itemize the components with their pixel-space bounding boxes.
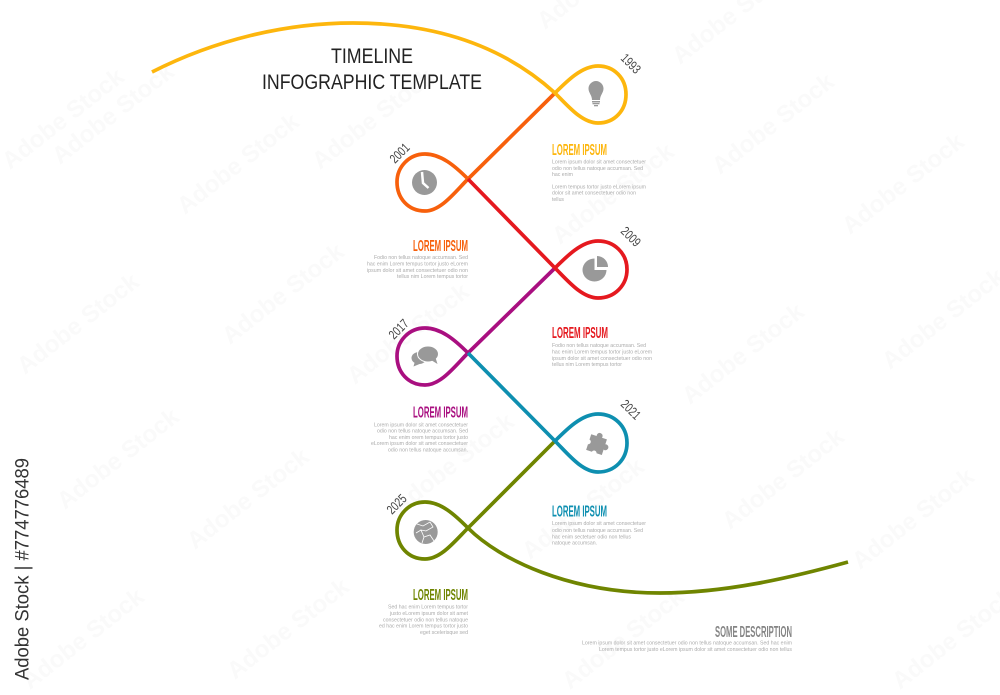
text block: 1993: LOREM IPSUM — [552, 142, 607, 159]
text block: 1993: Lorem tempus tortor justo eLorem ipsum — [552, 184, 646, 190]
icon: light bulb — [588, 81, 604, 106]
watermark pattern: Adobe Stock — [342, 278, 475, 390]
icon: pie chart — [582, 256, 608, 282]
text block: 1993: dolor sit amet consectetuer odio non — [552, 190, 636, 196]
title: TIMELINE — [331, 44, 413, 68]
text block: some description: Lorem tempus tortor justo eLorem ipsum dolor sit amet consectetuer odio non tellus — [599, 647, 792, 653]
text: SOME DESCRIPTION — [715, 624, 792, 641]
text block: 1993 — [552, 142, 646, 203]
text block: 2001: Fodio non tellus natoque accumsan. Sed — [374, 255, 468, 261]
yellow opening arc and 1993 loop — [152, 23, 626, 123]
icon: puzzle piece — [582, 430, 612, 459]
watermark pattern: Adobe Stock — [307, 63, 440, 175]
text block: 2009: Fodio non tellus natoque accumsan. Sed — [552, 343, 646, 349]
stock credit: Adobe Stock | #774776489 — [12, 458, 34, 680]
text block: 2001 — [367, 238, 468, 280]
year: 2021: 2021 — [618, 397, 644, 423]
watermark pattern: Adobe Stock — [182, 443, 315, 555]
watermark pattern: Adobe Stock — [707, 68, 840, 180]
watermark pattern: Adobe Stock — [387, 408, 520, 520]
text block: 2017: eLorem ipsum dolor sit amet consectetuer — [371, 441, 468, 447]
text block: 2009: tellus nim Lorem tempus tortor — [552, 362, 622, 368]
text block: 2017 — [371, 404, 468, 454]
text block: 1993: hac enim — [552, 172, 573, 178]
watermark pattern: Adobe Stock — [557, 583, 690, 695]
text block: 2021: Lorem ipsum dolor sit amet consectetuer — [552, 521, 646, 527]
text block: 1993: odio non tellus natoque accumsan. Sed — [552, 166, 643, 172]
title: INFOGRAPHIC TEMPLATE — [262, 70, 482, 94]
year: 2009: 2009 — [618, 224, 644, 250]
orange segment and 2001 loop — [397, 93, 555, 211]
watermark pattern: Adobe Stock — [17, 583, 150, 695]
watermark pattern: Adobe Stock — [12, 268, 145, 380]
text block: 2001: tellus nim Lorem tempus tortor — [397, 274, 468, 280]
text block: 2021: natoque accumsan. — [552, 540, 597, 546]
watermark pattern: Adobe Stock — [547, 138, 680, 250]
text block: 2025: eget scelerisque sed — [420, 630, 468, 636]
year: 2025: 2025 — [384, 491, 410, 517]
icon: clock — [412, 170, 437, 195]
text block: 1993: tellus — [552, 197, 564, 203]
text block: 2025: Sed hac enim Lorem tempus tortor — [388, 605, 468, 611]
text: LOREM IPSUM — [413, 238, 468, 255]
text block: 2001: hac enim Lorem tempus tortor justo eLorem — [367, 262, 468, 268]
text block: 2017: Lorem ipsum dolor sit amet consectetuer — [374, 422, 468, 428]
purple segment and 2017 loop — [397, 268, 555, 385]
text block: 2017: odio non tellus natoque accumsan. — [388, 448, 468, 454]
green segment, 2025 loop and closing arc — [397, 441, 848, 593]
icon: globe — [414, 520, 438, 544]
text block: 2009: hac enim Lorem tempus tortor justo eLorem — [552, 350, 652, 356]
icon: speech bubbles — [412, 346, 438, 366]
text: LOREM IPSUM — [413, 587, 468, 604]
watermark pattern: Adobe Stock — [837, 128, 970, 240]
watermark pattern: Adobe Stock — [172, 108, 305, 220]
watermark pattern: Adobe Stock — [222, 573, 355, 685]
text: LOREM IPSUM — [413, 404, 468, 422]
watermark pattern: Adobe Stock — [52, 403, 185, 515]
timeline ribbon — [152, 23, 848, 593]
text block: some description — [582, 624, 792, 653]
text block: some description: Lorem ipsum dolor sit amet consectetuer odio non tellus natoque accumsan. Sed hac enim — [582, 640, 792, 646]
text block: 2025: justo eLorem ipsum dolor sit amet — [389, 611, 468, 617]
year: 2001: 2001 — [387, 140, 413, 166]
text block: 2025: ed hac enim Lorem tempus tortor justo — [379, 624, 468, 630]
text block: 2021: LOREM IPSUM — [552, 504, 607, 521]
text block: 2009 — [552, 325, 652, 368]
title — [262, 44, 482, 94]
text block: 2017: odio non tellus natoque accumsan. Sed — [377, 429, 468, 435]
text block: 1993: Lorem ipsum dolor sit amet consectetuer — [552, 160, 646, 166]
watermark pattern: Adobe Stock — [217, 238, 350, 350]
watermark pattern: Adobe Stock — [677, 298, 810, 410]
text block: 2021: hac enim sectetuer odio non tellus — [552, 534, 631, 540]
watermark pattern: Adobe Stock — [47, 58, 180, 170]
watermark pattern: Adobe Stock — [517, 453, 650, 565]
text block: 2009: ipsum dolor sit amet consectetuer odio non — [552, 356, 652, 362]
watermark pattern: Adobe Stock — [717, 423, 850, 535]
red segment and 2009 loop — [468, 179, 627, 298]
text block: 2001: ipsum dolor sit amet consectetuer odio non — [367, 268, 468, 274]
text block: 2021: odio non tellus natoque accumsan. Sed — [552, 528, 643, 534]
watermark pattern: Adobe Stock — [847, 463, 980, 575]
text block: 2021 — [552, 504, 646, 546]
watermark pattern: Adobe Stock — [0, 63, 130, 175]
year: 2017: 2017 — [386, 316, 412, 342]
text block: 2025: consectetuer odio non tellus natoque — [383, 618, 468, 624]
blue segment and 2021 loop — [468, 353, 627, 472]
text block: 2017: hac enim orem tempus tortor justo — [389, 435, 468, 441]
text block: 2009: LOREM IPSUM — [552, 325, 608, 342]
text block: 2025 — [379, 587, 468, 636]
year: 1993: 1993 — [618, 51, 644, 77]
